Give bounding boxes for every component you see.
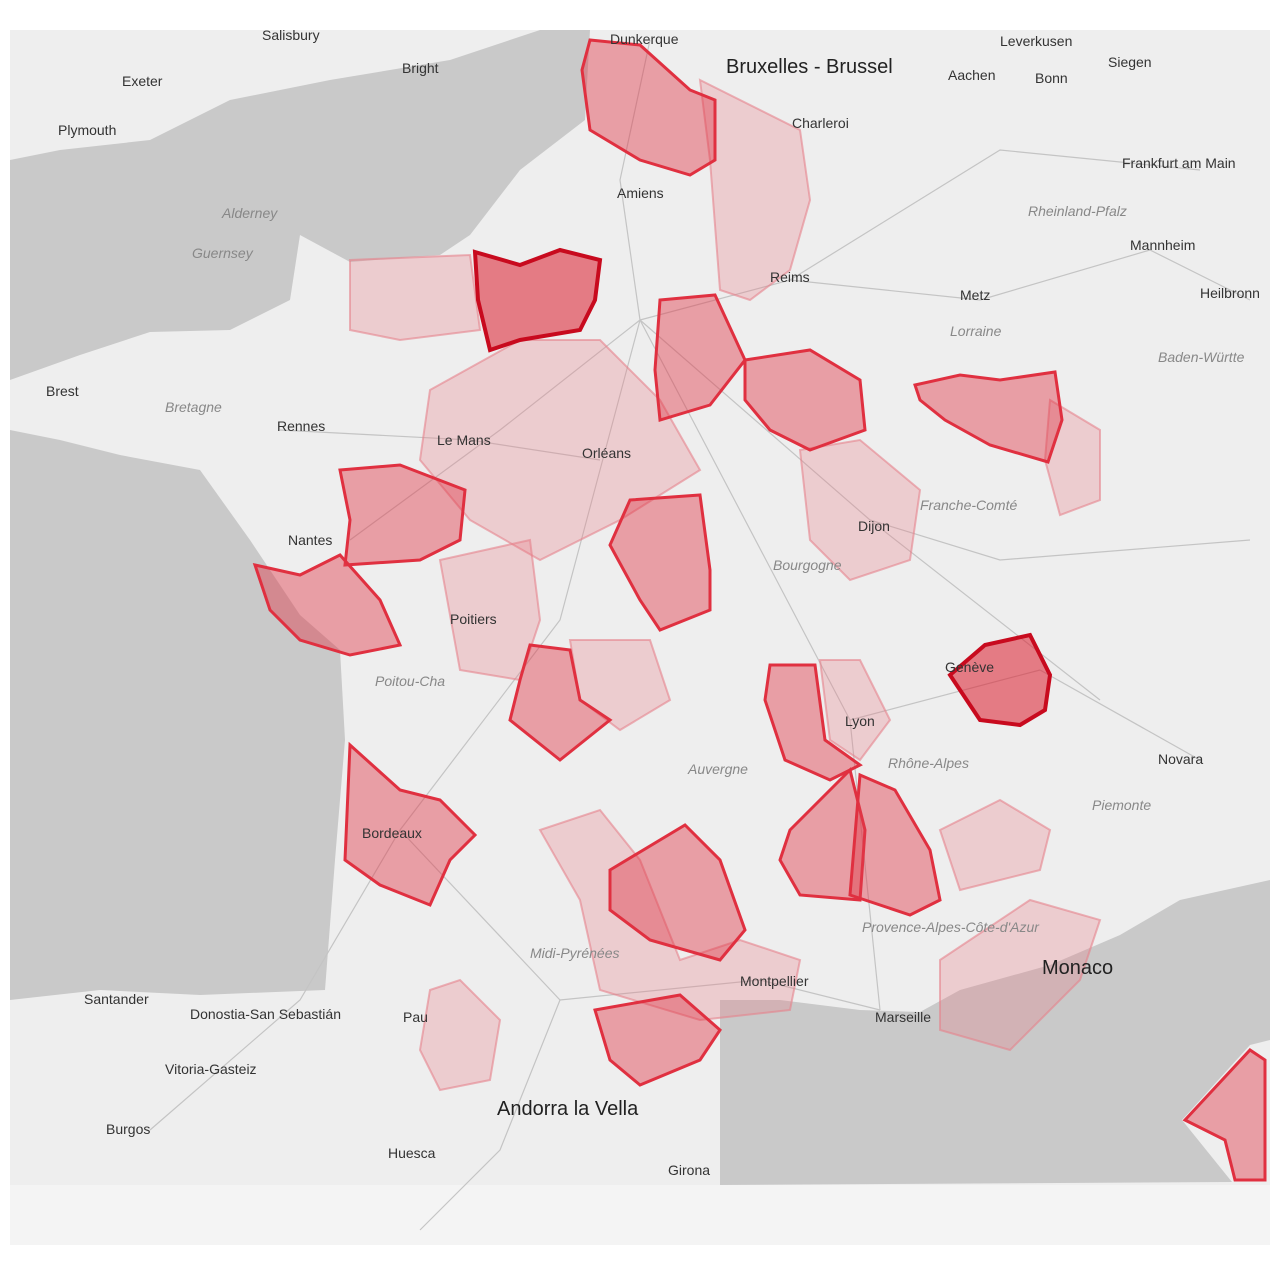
city labels: Orléans	[582, 445, 631, 461]
bottom fade strip	[10, 1185, 1270, 1245]
city labels: Charleroi	[792, 115, 849, 131]
city labels: Burgos	[106, 1121, 150, 1137]
map: Midi-Pyrénées	[530, 945, 619, 961]
city labels: Novara	[1158, 751, 1203, 767]
city labels: Marseille	[875, 1009, 931, 1025]
city labels: Aachen	[948, 67, 995, 83]
city labels: Salisbury	[262, 27, 320, 43]
city labels: Pau	[403, 1009, 428, 1025]
city labels: Huesca	[388, 1145, 436, 1161]
city labels: Leverkusen	[1000, 33, 1072, 49]
city labels: Girona	[668, 1162, 710, 1178]
map: Andorra la Vella	[497, 1098, 639, 1120]
city labels: Bright	[402, 60, 439, 76]
map: Franche-Comté	[920, 497, 1017, 513]
map: Bruxelles - Brussel	[726, 56, 893, 78]
map: Poitou-Cha	[375, 673, 445, 689]
map: Rhône-Alpes	[888, 755, 969, 771]
city labels: Siegen	[1108, 54, 1152, 70]
city labels: Frankfurt am Main	[1122, 155, 1236, 171]
city labels: Reims	[770, 269, 810, 285]
map: Lorraine	[950, 323, 1002, 339]
city labels: Dunkerque	[610, 31, 679, 47]
city labels: Le Mans	[437, 432, 491, 448]
regions: dark	[475, 250, 1050, 725]
city labels: Donostia-San Sebastián	[190, 1006, 341, 1022]
map: Guernsey	[192, 245, 254, 261]
city labels: Brest	[46, 383, 79, 399]
city labels: Bonn	[1035, 70, 1068, 86]
sea: atlantic	[10, 430, 345, 1000]
city labels: Montpellier	[740, 973, 809, 989]
city labels: Bordeaux	[362, 825, 422, 841]
map: Piemonte	[1092, 797, 1151, 813]
city labels: Heilbronn	[1200, 285, 1260, 301]
map: Bretagne	[165, 399, 222, 415]
map: Provence-Alpes-Côte-d'Azur	[862, 919, 1040, 935]
city labels: Mannheim	[1130, 237, 1195, 253]
map: Bourgogne	[773, 557, 842, 573]
city labels: Vitoria-Gasteiz	[165, 1061, 257, 1077]
map: Baden-Württe	[1158, 349, 1245, 365]
city labels: Amiens	[617, 185, 664, 201]
city labels: Nantes	[288, 532, 332, 548]
sea: channel	[10, 30, 590, 380]
city labels: Santander	[84, 991, 149, 1007]
city labels: Poitiers	[450, 611, 497, 627]
city labels: Rennes	[277, 418, 325, 434]
city labels: Genève	[945, 659, 994, 675]
regions: medium	[255, 40, 1265, 1180]
city labels: Metz	[960, 287, 990, 303]
regions: light	[350, 80, 1100, 1090]
map: Rheinland-Pfalz	[1028, 203, 1127, 219]
city labels: Lyon	[845, 713, 875, 729]
map: Alderney	[221, 205, 278, 221]
sea: mediterranean	[720, 880, 1270, 1185]
map: Auvergne	[687, 761, 748, 777]
city labels: Plymouth	[58, 122, 116, 138]
road lines	[150, 40, 1250, 1230]
city labels: Dijon	[858, 518, 890, 534]
city labels: Exeter	[122, 73, 163, 89]
map: Monaco	[1042, 957, 1113, 979]
